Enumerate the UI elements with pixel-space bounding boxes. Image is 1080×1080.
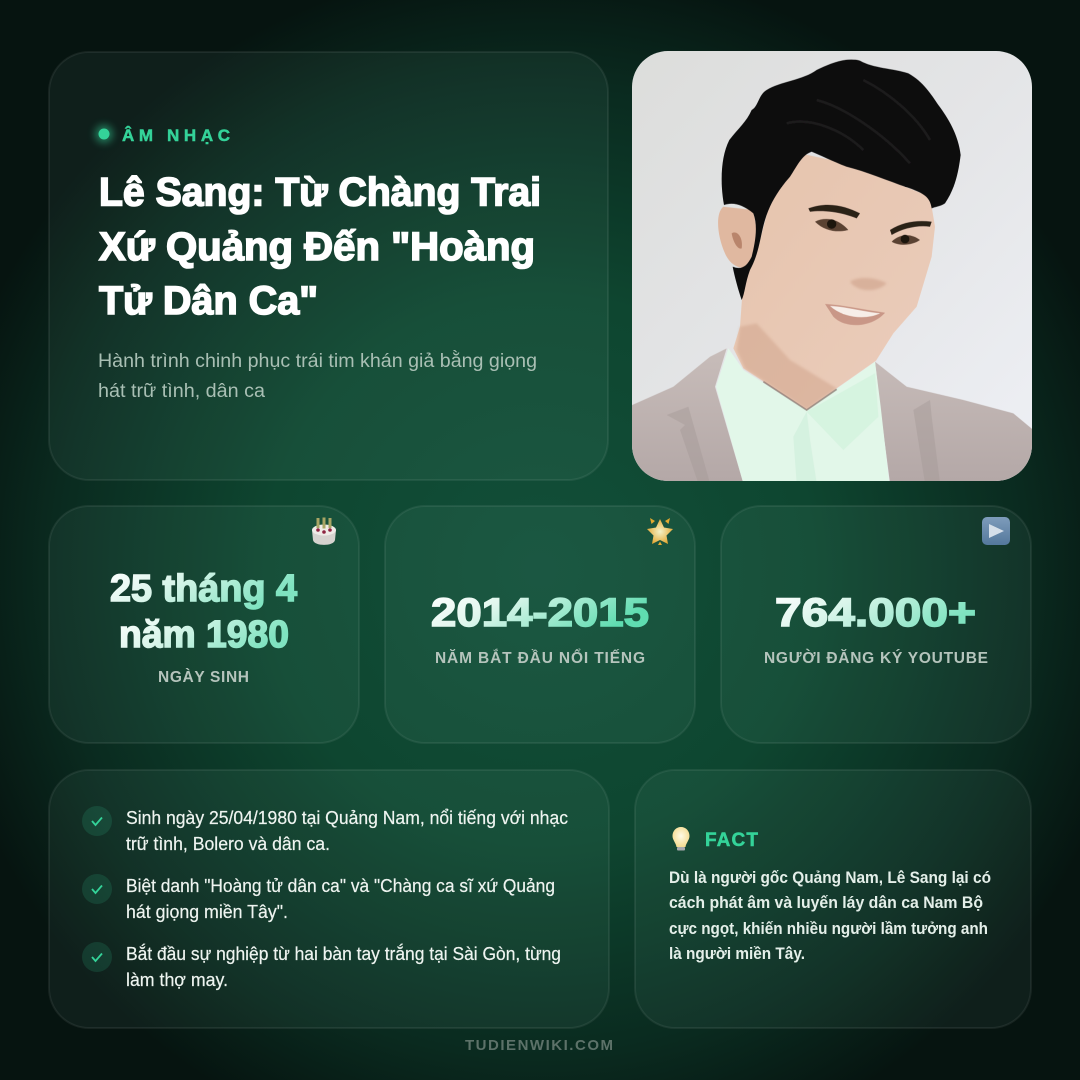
portrait photo <box>630 51 1033 483</box>
brows and eyes <box>808 205 932 235</box>
jacket <box>630 348 1033 483</box>
title: Tử Dân Ca" <box>99 279 318 323</box>
hair <box>722 59 961 300</box>
fact heading: FACT <box>705 830 758 851</box>
point 2: Biệt danh "Hoàng tử dân ca" và "Chàng ca sĩ xứ Quảng <box>126 876 555 896</box>
point 3: Bắt đầu sự nghiệp từ hai bàn tay trắng tại Sài Gòn, từng <box>126 943 561 964</box>
fact text: cực ngọt, khiến nhiều người lầm tưởng anh <box>669 920 988 938</box>
category tag: ÂM NHẠC <box>122 126 230 145</box>
value: 764.000+ <box>775 591 976 635</box>
collar shadow <box>763 382 837 410</box>
icon: play button <box>982 517 1010 545</box>
panel: key points <box>49 770 609 1028</box>
fact text: cách phát âm và luyến láy dân ca Nam Bộ <box>669 894 983 912</box>
point 3: làm thợ may. <box>126 970 228 990</box>
title: Xứ Quảng Đến "Hoàng <box>99 225 535 269</box>
panel: subscribers stat <box>721 506 1031 743</box>
point 1: Sinh ngày 25/04/1980 tại Quảng Nam, nổi tiếng với nhạc <box>126 808 568 828</box>
label: NGƯỜI ĐĂNG KÝ YOUTUBE <box>764 649 988 667</box>
fact text: Dù là người gốc Quảng Nam, Lê Sang lại có <box>669 869 991 887</box>
value: năm 1980 <box>119 614 289 656</box>
panel: birth date stat <box>49 506 359 743</box>
shirt <box>716 348 889 483</box>
mouth <box>825 304 885 325</box>
point 1 <box>82 806 568 854</box>
point 2: hát giọng miền Tây". <box>126 902 288 922</box>
panel: fame years stat <box>385 506 695 743</box>
value: 2014-2015 <box>431 591 649 635</box>
value: 25 tháng 4 <box>110 568 297 610</box>
point 2 <box>82 874 555 922</box>
value <box>110 568 297 656</box>
subtitle: Hành trình chinh phục trái tim khán giả bằng giọng <box>98 350 537 372</box>
label: NGÀY SINH <box>158 669 249 686</box>
panel: intro <box>49 52 608 480</box>
fact text <box>669 869 991 963</box>
point 3 <box>82 942 561 990</box>
neck and face <box>733 153 935 409</box>
panel: fact <box>635 770 1031 1028</box>
ear <box>718 207 758 268</box>
point 1: trữ tình, Bolero và dân ca. <box>126 834 330 854</box>
icon: light bulb <box>672 827 690 850</box>
title <box>99 170 541 323</box>
footer: TUDIENWIKI.COM <box>465 1037 613 1054</box>
icon: cake <box>312 518 336 545</box>
title: Lê Sang: Từ Chàng Trai <box>99 170 541 214</box>
subtitle: hát trữ tình, dân ca <box>98 381 265 402</box>
nose <box>850 278 887 290</box>
subtitle <box>98 350 537 402</box>
label: NĂM BẮT ĐẦU NỔI TIẾNG <box>435 649 645 667</box>
fact text: là người miền Tây. <box>669 945 805 963</box>
icon: star <box>647 518 673 545</box>
